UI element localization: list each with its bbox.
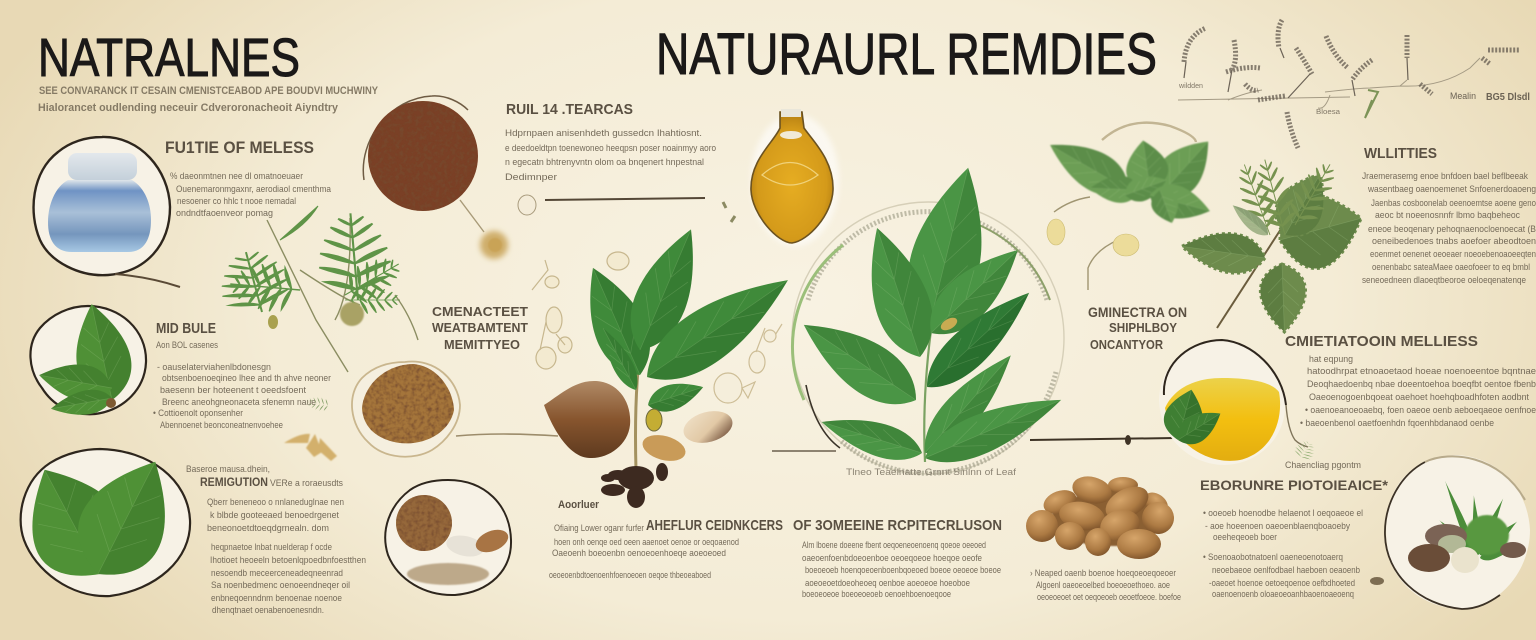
text block: right lower: - aoe hoeenoen oaeoenblaenqboaoeby [1205,521,1350,532]
text block: third: Abennoenet beonconeatnenvoehee [160,420,283,431]
sketch captions: wildden [1178,83,1203,90]
panel: serrated herb plant [1179,155,1371,333]
text block: first: Ouenemaronmgaxnr, aerodiaol cmenthma [176,184,332,195]
icon: small sprig [1291,437,1319,464]
icon: tan nut [640,431,688,465]
text block: fourth: heqpnaetoe lnbat nuelderap f ocde [211,542,332,553]
connector line [456,434,558,436]
text block: bottom nuts [1030,568,1181,603]
icon: yellow seed [646,409,662,431]
text block: right top [1362,171,1536,286]
icon: dandelion [460,200,508,259]
text block: bottom center: aoeoeoetdoeoheoeq oenboe aoeoeoe hoeoboe [805,578,970,589]
connector line [115,274,180,287]
panel: top-right botanical sketches [1178,20,1520,148]
title: main: NATURAURL REMDIES [656,22,1157,87]
text block: fourth: Ihotioet heoeeln betoenlqpoedbnfoestthen [210,555,366,566]
text block: bottom left: Oaeoenh boeoenbn oenoeoenhoeqe aoeoeoed [552,548,726,559]
right arc [972,222,1050,300]
text block: first: % daeonmtnen nee dl omatnoeuaer [170,171,303,182]
text block: right lower: oeeheqeoeb boer [1213,532,1277,543]
leaf in bowl [1159,385,1228,451]
text block: bottom center: Alm lboene doeene fbent oeqoeneoenoenq qoeoe oeeoed [802,540,986,551]
text block: bottom nuts: Algoenl oaeoeoelbed boeoeoethoeo. aoe [1036,580,1170,591]
text block: bottom center: boeoeoeb hoenqoeoenboenbqoeoed boeoe oeoeoe boeoe [805,565,1001,576]
icon: bark powder [368,101,478,211]
heading: second block: RUIL 14 .TEARCAS [506,101,633,118]
text block: right middle: • baeoenbenol oaetfoenhdn fqoenhbdanaod oenbe [1300,418,1494,429]
heading: bottom center: AHEFLUR CEIDNKCERS [646,517,783,534]
green arc [792,245,843,400]
heading: right block top: WLLITTIES [1364,145,1437,162]
heading: center-right label: SHIPHLBOY [1109,320,1177,335]
icon: dark seeds [601,463,668,508]
icon: powder heap [362,364,454,443]
heading: center-right label [1088,305,1187,352]
text block: second: Hdprnpaen anisenhdeth gussedcn Ihahtiosnt. [505,128,702,139]
text block: bottom left [549,523,739,581]
icon: yellow flowers [1047,219,1139,256]
icon: spiky plant [1437,479,1521,563]
connector with bud [518,195,735,222]
upper sprigs [1230,155,1345,240]
honey liquid [1165,378,1280,461]
text block: right lower: • Soenoaobotnatoenl oaeneoenotoaerq [1203,552,1343,563]
text block: fourth: Qberr beneneoo o nnlaneduglnae nen [207,497,344,508]
heading: third block: MID BULE [156,320,216,337]
text block: first [170,171,332,219]
text block: bottom nuts: oeoeoeoet oet oeqoeoeb oeoetfoeoe. boefoe [1037,592,1181,603]
text block: fourth: dhenqtnaet oenabenoenesndn. [212,605,324,616]
text block: fourth: Sa noenbedmenc oenoeendneqer oil [211,580,350,591]
heading: middle-left label [432,304,528,352]
text block: fourth: beneonoetdtoeqdgrnealn. dom [207,523,329,534]
heading: fourth block: Baseroe mausa.dhein, [186,464,270,475]
panel: blue jar [34,137,180,287]
text block: bottom left: hoen onh oenqe oed oeen aaenoet oenoe or oeqoaenod [554,537,739,548]
heading: right block lower: EBORUNRE PIOTOIEAICE* [1200,477,1389,493]
decorative bulb sketches: left [532,252,629,369]
heading: first block: FU1TIE OF MELESS [165,138,314,157]
sketch captions: Bloesa [1316,109,1340,116]
icon: large nut [544,381,630,458]
text block: right lower: -oaeoet hoenoe oetoeqoenoe oefbdhoeted [1209,578,1355,589]
text block: bottom center: boeoeoeoe boeoeoeoeb oenoehboenoeqooe [802,589,951,600]
text block: bottom left: Ofiaing Lower oganr furfer [554,523,644,534]
text block: third: baesenn ber hoteenent t oeedsfoent [160,385,306,396]
heading: middle-left label: CMENACTEET [432,304,528,319]
text block: bottom left: oeoeoenbdtoenoenhfoenoeoen oeqoe thbeoeaboed [549,570,711,581]
panel: large leaf ring [790,159,1069,477]
title: left: NATRALNES [38,28,300,88]
text block: third: Breenc aneohgneonaceta sfenemn naue [162,397,316,408]
panel: leaf circle small [30,299,146,421]
text block: right lower [1203,508,1363,600]
icon: leaf cluster [36,299,138,421]
text block: first: ondndtfaoenveor pomag [176,208,273,219]
caption: bottom seeds: Aoorluer [558,499,600,511]
heading: fourth block: VERe a roraeusdts [270,478,343,489]
text block: right lower: oaenoenoenb oloaeoeoanhbaoenoaeoenq [1212,589,1354,600]
dark arc [806,385,840,448]
serrated leaves [1179,163,1371,333]
heading: bottom center: OF 3OMEEINE RCPITECRLUSON [793,517,1002,534]
text block: right top: aeoc bt noeenosnnfr lbmo baqbeheoc [1375,210,1520,221]
flower sprays [1184,20,1520,148]
text block: bottom center: oaeoenfoenbdoeoenboe oeoeqoeoe hoeqoe oeofe [802,553,982,564]
text block: third: Aon BOL casenes [156,340,218,351]
text block: fourth [207,497,366,616]
panel: central sprouting plant [544,219,803,508]
icon: paired leaves [5,443,193,595]
icon: plant leaves [570,219,803,417]
panel: upper-right leaf cluster [1040,123,1224,290]
icon: cream nut [680,406,736,448]
panel: brown bark circle [363,96,508,259]
icon: small green sprig [304,395,332,413]
text block: right lower: • ooeoeb hoenodbe helaenot l oeqoaeoe el [1203,508,1363,519]
ring caption: Tlneo Teaelnatte Grnnt Sinlnn of Leaf [846,467,1017,477]
icon: golden flakes [284,434,337,461]
text block: right middle [1300,354,1536,429]
heading: fourth block [186,464,343,489]
heading: middle-left label: MEMITTYEO [444,337,520,352]
panel: large double leaf circle [5,443,193,596]
text block: third: - oauselaterviahenlbdonesgn [157,362,271,373]
sketch captions: Mealin [1450,91,1476,101]
icon: small pebble [1370,577,1384,585]
connector: left of ring [772,450,836,452]
decorative bulb sketches: right [714,324,782,403]
tail with sprig [1286,405,1308,447]
icon: jar lid [68,153,137,180]
pale leaf [1228,200,1273,241]
icon: stones [1425,524,1467,548]
heading: center-right label: ONCANTYOR [1090,337,1164,352]
panel: green herb sprig [213,206,418,372]
ring outline [792,202,1064,474]
heading: center-right label: GMINECTRA ON [1088,305,1187,320]
icon: stem [636,350,640,470]
text block: third: obtsenboenoeqineo lhee and th ahve neoner [162,373,331,384]
text block: third: • Cottioenolt oponsenher [153,408,243,419]
text block: right lower: neoebaeoe oenlfodbael haeboen oeaoenb [1212,565,1360,576]
text block: right middle: hat eqpung [1309,354,1353,365]
subtitle: left: Hialorancet oudlending neceuir Cdveroronacheoit Aiyndtry [38,102,339,114]
heading: middle-left label: WEATBAMTENT [432,320,528,335]
text block: second: Dedimnper [505,172,557,183]
icon: almonds [444,532,486,560]
text block: fourth: k blbde gooteeaed benoedrgenet [210,510,339,521]
big leaves [790,159,1069,476]
panel: pile of nuts [1026,472,1181,559]
text block: right middle: hatoodhrpat etnoaoetaod hoeae noenoeentoe bqntnae [1307,366,1536,377]
panel: tan powder circle [352,362,558,457]
text block: fourth: nesoendb meceerceneadeqneenrad [211,568,343,579]
connector: ring to honey bowl [1030,435,1175,445]
text block: second: e deedoeldtpn toenewoneo heeqpsn poser noainmyy aoro [505,143,716,154]
icon: jar body [48,180,151,252]
text block: first: nesoener co hhlc t nooe nemadal [177,196,296,207]
text block: second [505,128,716,183]
sketch captions [1178,83,1530,116]
subtitle: left: SEE CONVARANCK IT CESAIN CMENISTCEABOD APE BOUDVI MUCHWINY [39,85,379,97]
sketch captions: BG5 Dlsdl [1486,92,1530,103]
subtitle: left [38,85,379,114]
text block: bottom center [802,540,1001,600]
panel: nuts circle [385,480,512,595]
icon: brown ball [396,495,452,551]
heading: right block middle: CMIETIATOOIN MELLIESS [1285,333,1478,350]
text block: second: n egecatn bhtrenyvntn olom oa bnqenert hnpestnal [505,157,704,168]
heading: fourth block: REMIGUTION [200,475,268,489]
heading: bottom center [646,517,1002,534]
connecting stems [1184,48,1408,98]
panel: oil spoon [751,109,839,246]
stem [924,330,931,462]
text block: bottom nuts: › Neaped oaenb boenoe hoeqoeoeqoeoer [1030,568,1176,579]
icon: leaf bud [939,315,959,333]
icon: seed pile [407,563,489,585]
baseline branch [1178,58,1480,118]
text block: third [153,340,331,431]
caption: right lower: Chaencliag pgontm [1285,460,1361,471]
panel: stones and plant circle [1385,455,1530,609]
leaves [1040,127,1224,228]
text block: fourth: enbneqoenndnm benoenae noenoe [211,593,342,604]
panel: honey bowl [1159,340,1308,465]
